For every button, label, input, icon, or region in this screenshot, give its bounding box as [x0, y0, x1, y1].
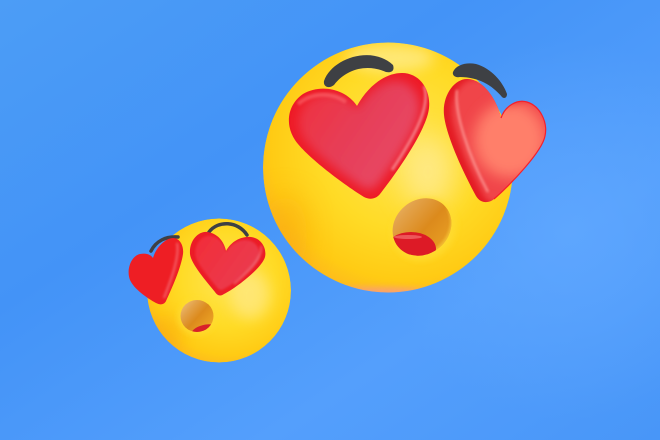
large left heart eye — [289, 73, 429, 199]
small emoji face — [147, 218, 291, 362]
large emoji — [263, 42, 554, 305]
large left eyebrow — [324, 55, 394, 87]
small right heart eye — [190, 232, 265, 295]
small right eyebrow — [209, 224, 247, 235]
small left heart eye — [129, 238, 183, 304]
large emoji face — [263, 42, 513, 305]
small mouth — [178, 300, 214, 335]
small emoji — [129, 218, 291, 362]
large right eyebrow — [453, 63, 507, 98]
large mouth — [392, 194, 456, 261]
large right heart eye — [444, 79, 554, 202]
small left eyebrow — [151, 237, 178, 251]
